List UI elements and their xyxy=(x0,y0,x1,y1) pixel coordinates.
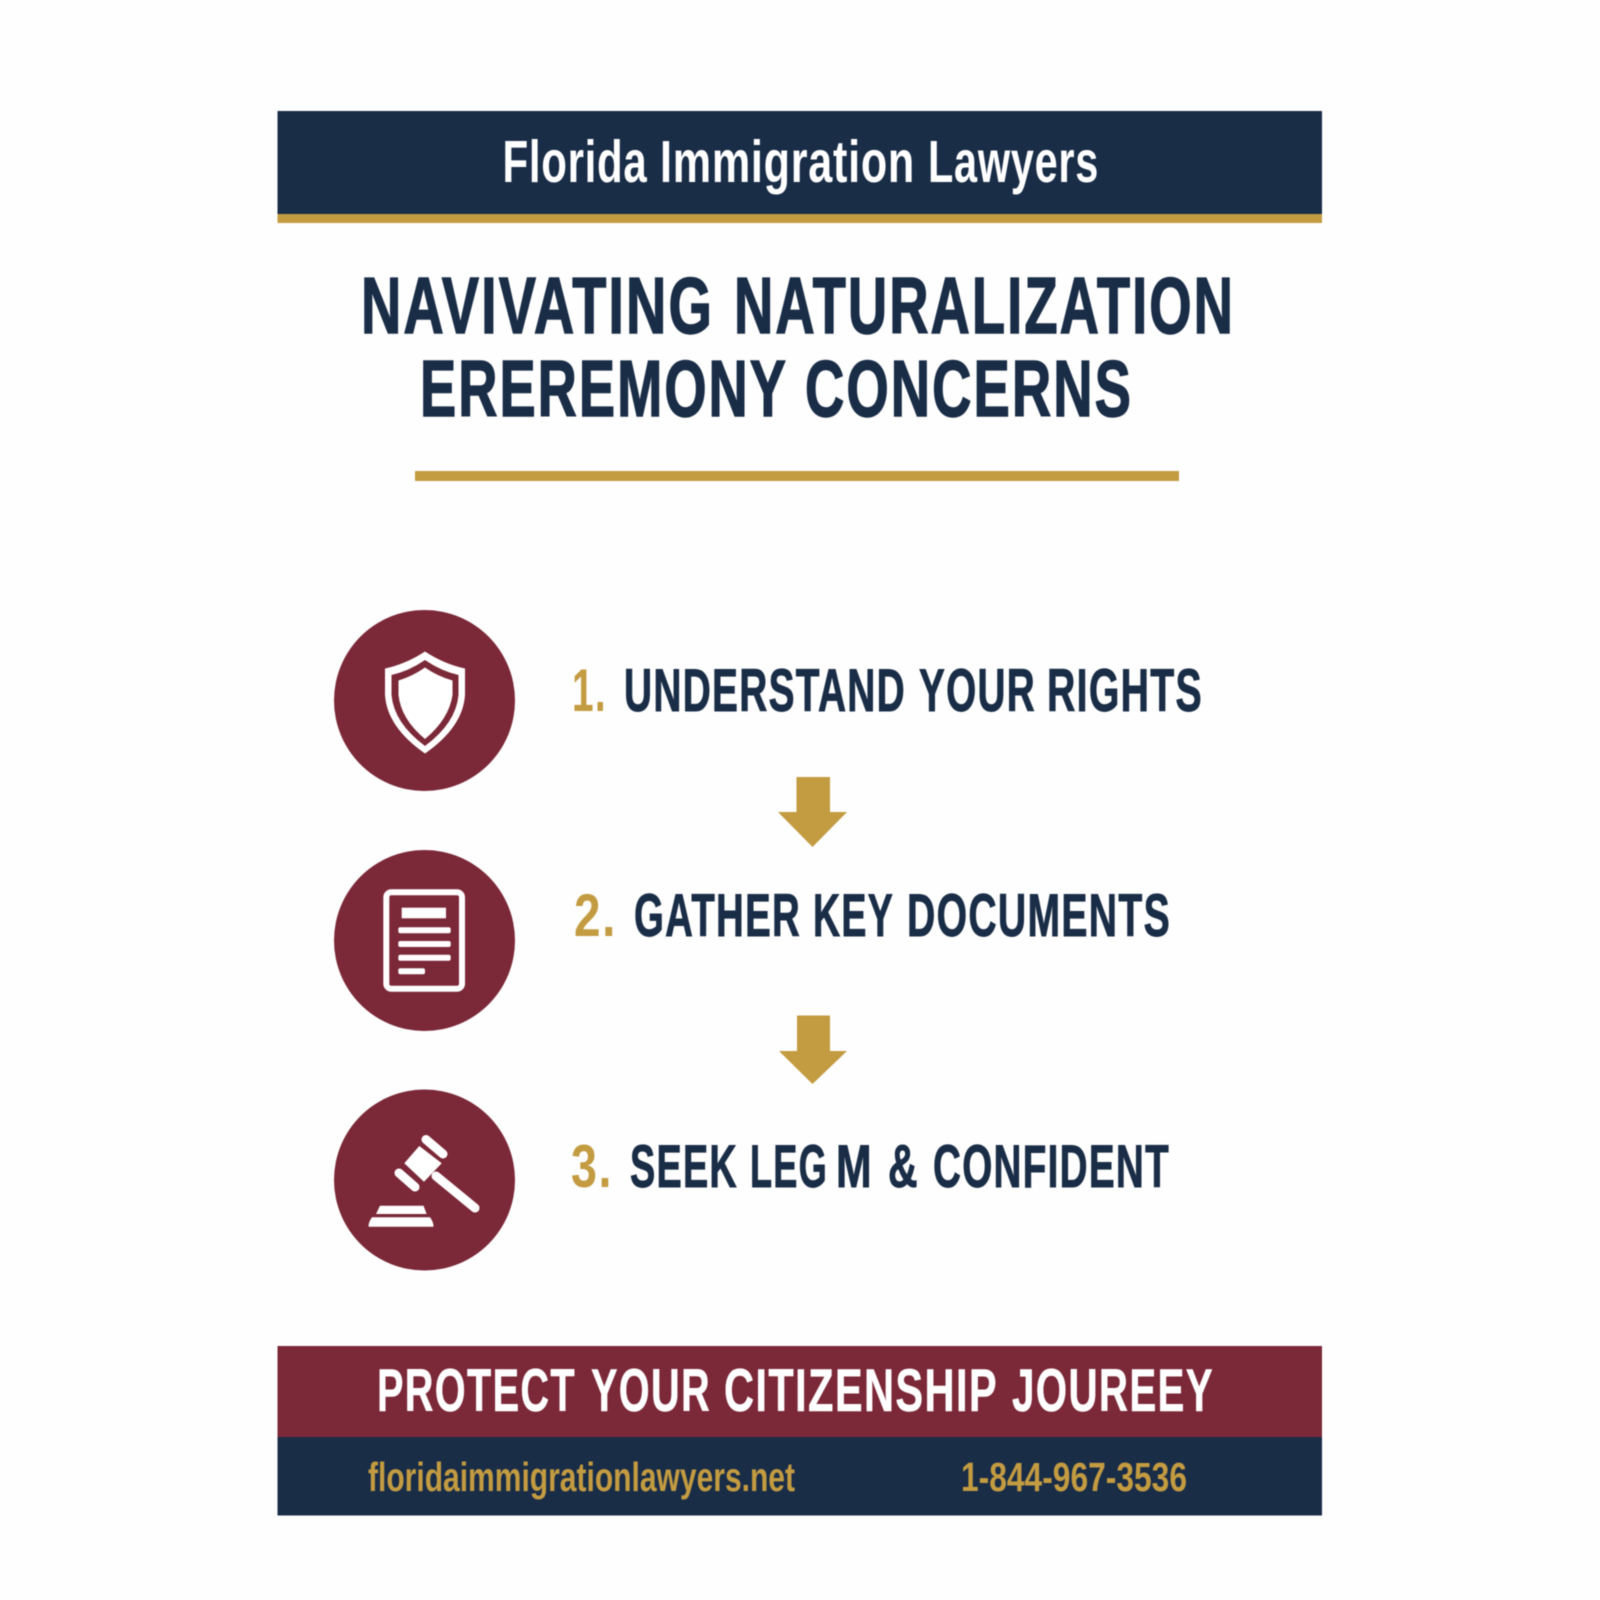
call to action band: YOUR xyxy=(591,1357,711,1424)
title: NAVIVATING xyxy=(361,261,714,350)
call to action band xyxy=(278,1346,1322,1437)
step 1 label: 1. xyxy=(572,657,607,724)
step 3 label: M xyxy=(836,1133,873,1200)
website: floridaimmigrationlawyers.net xyxy=(368,1454,795,1500)
step 2 label: 2. xyxy=(574,882,617,949)
step 3 label: SEEK xyxy=(630,1133,738,1200)
step 3: seek legal counsel xyxy=(334,1090,1170,1270)
title: CONCERNS xyxy=(805,344,1133,433)
step 3 label: & xyxy=(888,1133,919,1200)
step 2 label: GATHER xyxy=(634,882,801,949)
title underline xyxy=(415,471,1179,481)
step 2 label: KEY xyxy=(813,882,894,949)
icon: document xyxy=(334,850,515,1031)
firm name: Florida xyxy=(502,129,648,195)
step 2: gather key documents xyxy=(334,850,1171,1031)
step 2 label xyxy=(574,882,1171,949)
arrow 2 xyxy=(779,1016,847,1084)
step 3 label: 3. xyxy=(571,1133,613,1200)
phone: 1-844-967-3536 xyxy=(961,1454,1187,1500)
arrow 1 xyxy=(778,777,847,847)
step 2 label: DOCUMENTS xyxy=(907,882,1171,949)
step 1 label: RIGHTS xyxy=(1047,657,1203,724)
step 1: understand your rights xyxy=(334,610,1203,791)
call to action band: JOUREEY xyxy=(1012,1357,1214,1424)
title: EREREMONY xyxy=(420,344,788,433)
firm name: Immigration xyxy=(660,129,915,195)
icon: gavel xyxy=(334,1090,515,1270)
call to action band: PROTECT xyxy=(377,1357,576,1424)
step 3 label: CONFIDENT xyxy=(933,1133,1170,1200)
title xyxy=(361,261,1235,433)
step 1 label: UNDERSTAND xyxy=(624,657,906,724)
contact band xyxy=(278,1437,1322,1516)
call to action band: CITIZENSHIP xyxy=(724,1357,998,1424)
title: NATURALIZATION xyxy=(734,261,1235,350)
step 1 label: YOUR xyxy=(919,657,1036,724)
step 1 label xyxy=(572,657,1203,724)
step 3 label xyxy=(571,1133,1170,1200)
firm name xyxy=(502,129,1099,195)
firm name: Lawyers xyxy=(928,129,1099,195)
header banner xyxy=(278,111,1322,223)
step 3 label: LEG xyxy=(750,1133,828,1200)
icon: shield xyxy=(334,610,515,791)
